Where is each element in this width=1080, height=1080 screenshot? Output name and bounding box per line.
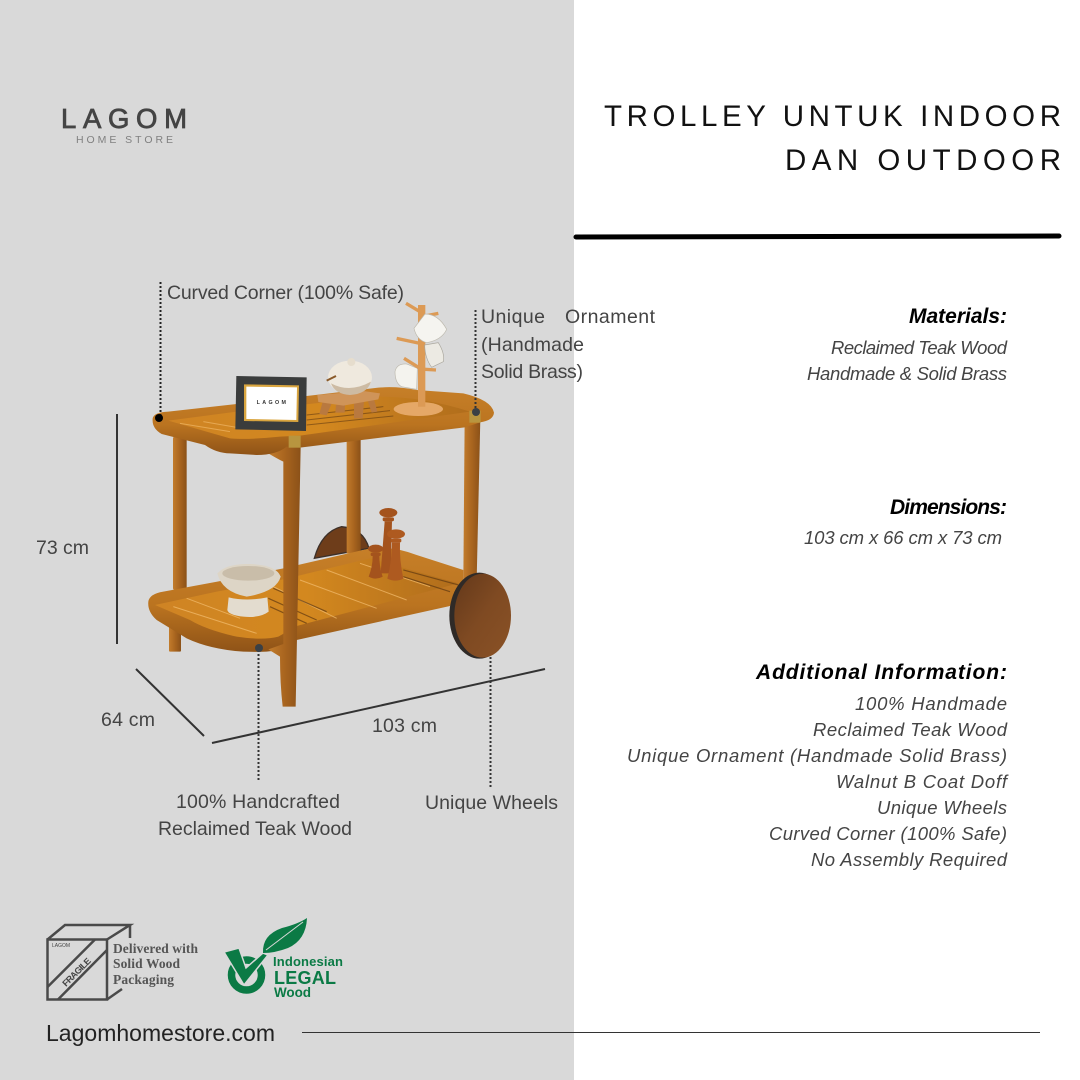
text: delivered with solid wood packaging: Delivered with bbox=[113, 941, 198, 956]
back wheel bbox=[314, 527, 369, 558]
text block: additional information: 100% Handmade bbox=[855, 693, 1007, 714]
mug tree bbox=[394, 303, 447, 416]
lower tray bbox=[148, 548, 463, 652]
title: TROLLEY UNTUK INDOOR bbox=[604, 100, 1061, 133]
bowl bbox=[217, 564, 281, 617]
text: delivered with solid wood packaging: Solid Wood bbox=[113, 956, 180, 971]
callout: handcrafted: 100% Handcrafted bbox=[176, 791, 340, 813]
text: delivered with solid wood packaging: Packaging bbox=[113, 972, 174, 987]
text block: additional information: Unique Wheels bbox=[877, 797, 1007, 818]
illustration: teak trolley bbox=[148, 303, 511, 707]
callout: unique wheels: Unique Wheels bbox=[425, 792, 558, 814]
logo: Indonesian Legal Wood bbox=[224, 918, 343, 1000]
text block: additional information: Reclaimed Teak Wood bbox=[813, 719, 1008, 740]
callout: curved corner: Curved Corner (100% Safe) bbox=[167, 282, 404, 304]
front wheel bbox=[449, 573, 511, 659]
callout: unique ornament: Ornament bbox=[565, 306, 656, 328]
callout: unique ornament: Solid Brass) bbox=[481, 361, 583, 383]
callout: unique ornament: (Handmade bbox=[481, 334, 584, 356]
dimension: width: 103 cm bbox=[372, 715, 437, 737]
text: delivered with solid wood packaging bbox=[113, 941, 198, 987]
text block: additional information bbox=[627, 661, 1009, 870]
text block: dimensions bbox=[804, 496, 1007, 548]
front leg bbox=[268, 445, 301, 707]
callout: unique ornament bbox=[472, 306, 656, 416]
text block: materials: Reclaimed Teak Wood bbox=[831, 337, 1008, 358]
text block: materials: Handmade & Solid Brass bbox=[807, 363, 1007, 384]
text block: additional information: Walnut B Coat Doff bbox=[836, 771, 1009, 792]
icon: wood packaging box bbox=[48, 925, 130, 1000]
callout: handcrafted: Reclaimed Teak Wood bbox=[158, 818, 352, 840]
callout: handcrafted bbox=[158, 644, 352, 840]
dimension: height: 73 cm bbox=[36, 537, 89, 559]
text block: materials: Materials: bbox=[909, 305, 1007, 328]
text block: materials bbox=[807, 305, 1008, 384]
logo: Lagom Home Store: LAGOM bbox=[61, 103, 187, 134]
title underline bbox=[576, 236, 1059, 237]
text block: additional information: Additional Information: bbox=[755, 661, 1007, 684]
dimension: depth: 64 cm bbox=[101, 709, 155, 731]
upper tray bbox=[153, 387, 494, 455]
title bbox=[604, 100, 1061, 177]
text block: dimensions: 103 cm x 66 cm x 73 cm bbox=[804, 527, 1002, 548]
text block: additional information: Unique Ornament (Handmade Solid Brass) bbox=[627, 745, 1007, 766]
footer rule bbox=[302, 1032, 1040, 1034]
logo: Indonesian Legal Wood: LEGAL bbox=[274, 968, 336, 988]
text block: additional information: No Assembly Required bbox=[811, 849, 1008, 870]
website: Lagomhomestore.com bbox=[46, 1020, 275, 1046]
back legs bbox=[169, 437, 361, 652]
right leg bbox=[463, 418, 480, 580]
logo: Indonesian Legal Wood: Wood bbox=[274, 985, 311, 1000]
icon: wood packaging box: FRAGILE bbox=[60, 956, 93, 988]
icon: wood packaging box: LAGOM bbox=[52, 943, 70, 949]
candle holders bbox=[368, 508, 405, 581]
callout: unique ornament: Unique bbox=[481, 306, 545, 328]
panel: grey left background bbox=[0, 0, 574, 1080]
title: DAN OUTDOOR bbox=[785, 144, 1061, 177]
text block: additional information: Curved Corner (100% Safe) bbox=[769, 823, 1007, 844]
callout: curved corner bbox=[155, 282, 404, 422]
photo frame: LAGOM bbox=[257, 400, 287, 406]
teapot on stool bbox=[317, 358, 380, 418]
dimension: depth bbox=[101, 669, 204, 736]
dimension: width bbox=[212, 669, 545, 743]
text block: dimensions: Dimensions: bbox=[890, 496, 1007, 519]
photo frame bbox=[235, 376, 307, 431]
logo: Indonesian Legal Wood: Indonesian bbox=[273, 954, 343, 969]
logo: Lagom Home Store: HOME STORE bbox=[76, 134, 173, 146]
